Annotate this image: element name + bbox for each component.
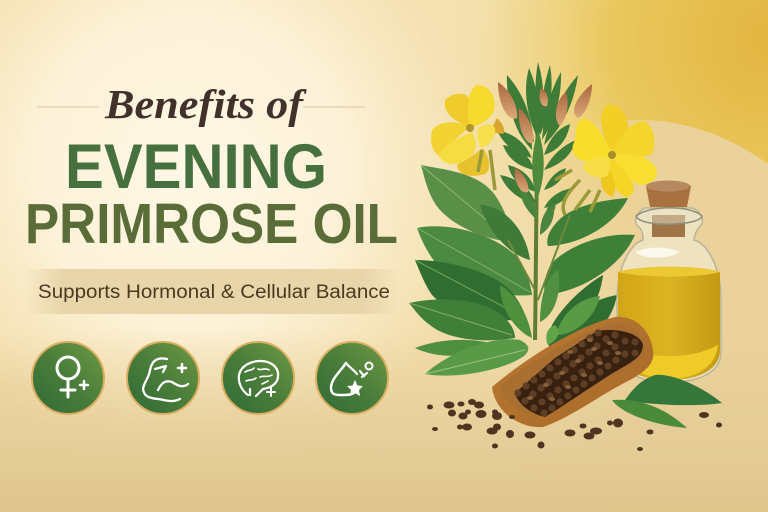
cork	[646, 182, 691, 207]
wooden scoop with seeds	[492, 317, 653, 427]
oil	[618, 267, 720, 380]
flower: left	[431, 85, 504, 176]
title: EVENING: EVENING	[65, 132, 327, 202]
bottom right leaves	[612, 375, 722, 428]
top foliage	[497, 62, 578, 235]
title: PRIMROSE OIL: PRIMROSE OIL	[25, 192, 398, 256]
stem	[535, 110, 538, 340]
leaves	[409, 165, 635, 376]
plant	[409, 62, 657, 376]
icon: muscle arm	[127, 342, 199, 414]
icon: brain	[222, 342, 294, 414]
flower: right	[572, 105, 657, 197]
buds	[498, 82, 592, 192]
subtitle band	[25, 269, 400, 314]
oil bottle	[617, 180, 721, 382]
sepals: right flower	[478, 150, 600, 215]
loose seeds	[427, 399, 722, 451]
subtitle band: Supports Hormonal & Cellular Balance	[38, 282, 390, 303]
icon: oil drop	[316, 342, 388, 414]
icon: female symbol	[32, 342, 104, 414]
title: Benefits of: Benefits of	[104, 81, 308, 127]
seeds in scoop	[514, 329, 639, 417]
